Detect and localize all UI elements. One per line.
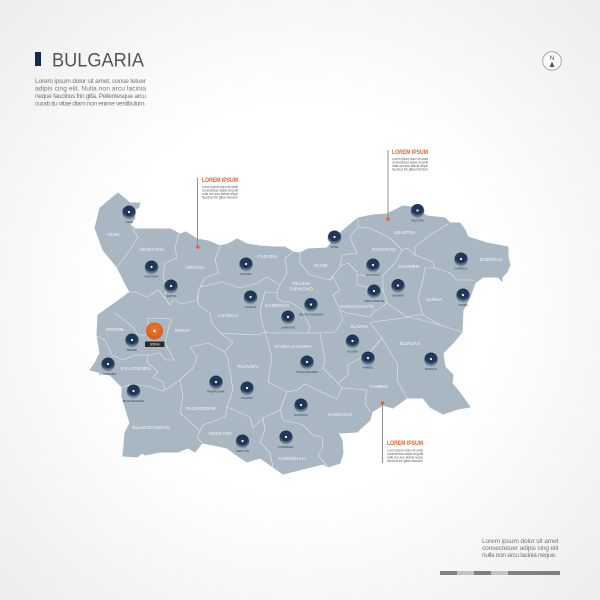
region labels: HASKOVO — [328, 412, 352, 418]
city labels: SLIVEN — [348, 350, 357, 354]
region labels: SMOLYAN — [208, 431, 232, 437]
callout: Vratsa — [196, 178, 238, 249]
callout: Yambol: Lorem ipsum dolor sit amet — [387, 448, 423, 452]
callout: Silistra: consectetuer adipis cing elit — [392, 160, 428, 164]
city labels: VARNA — [458, 303, 468, 307]
region labels: MONTANA — [140, 247, 165, 253]
city labels: PERNIK — [127, 348, 137, 352]
region labels: RUSE — [314, 263, 329, 269]
callout: Yambol: nulla non arcu lacinia neque — [387, 456, 423, 460]
region labels: TARGOVISHTE — [340, 304, 375, 310]
region labels: BLAGOEVGRAD — [132, 425, 170, 431]
region labels: SOFIA — [175, 328, 190, 334]
callout: Silistra — [386, 150, 428, 221]
region labels: LOVECH — [218, 313, 239, 319]
callout: Vratsa: consectetuer adipis cing elit — [202, 188, 238, 192]
intro text block — [35, 78, 147, 108]
city labels: BURGAS — [425, 367, 437, 371]
region labels: VARNA — [426, 297, 443, 303]
intro text block: Lorem ipsum dolor sit amet, conse tetuer — [35, 78, 147, 85]
region labels: SLIVEN — [350, 324, 368, 330]
footer text block: nulla non arcu lacinia neque. — [482, 552, 557, 559]
region labels: KYUSTENDIL — [121, 366, 152, 372]
callout: Silistra: nulla non arcu lacinia neque — [392, 164, 428, 168]
scale bar — [440, 571, 560, 575]
callout: Yambol: consectetuer adipis cing elit — [387, 452, 423, 456]
region labels: PERNIK — [106, 327, 125, 333]
city labels: PAZARDZHIK — [207, 390, 225, 394]
callout: Vratsa: LOREM IPSUM — [202, 178, 238, 184]
callout: Vratsa: faucibus frin gillae interdum — [202, 196, 238, 200]
region labels: KARDZHALI — [278, 456, 306, 462]
country shape — [90, 193, 510, 474]
region labels: STARA ZAGORA — [274, 344, 313, 350]
intro text block: neque faucibus frin gilla. Pellentesque arcu — [35, 93, 146, 100]
city labels: DOBRICH — [455, 266, 467, 270]
footer text block: Lorem ipsum dolor sit amet — [482, 538, 559, 545]
footer text block — [482, 538, 559, 559]
city labels: KYUSTENDIL — [99, 372, 117, 376]
region labels: VRATSA — [185, 265, 205, 271]
callout: Vratsa: Lorem ipsum dolor sit amet — [202, 185, 238, 189]
capital marker: Sofia — [145, 322, 164, 347]
city labels: YAMBOL — [362, 366, 374, 370]
callout: Yambol: faucibus frin gillae interdum — [387, 459, 423, 463]
city labels: VELIKO TARNOVO — [299, 312, 324, 316]
region labels: PLEVEN — [257, 254, 277, 260]
callout: Yambol: LOREM IPSUM — [387, 441, 423, 447]
city labels — [99, 218, 468, 453]
city labels: VIDIN — [125, 220, 133, 224]
city labels: KARDZHALI — [278, 445, 294, 449]
icon: north compass: N — [550, 55, 555, 62]
callout: Silistra: LOREM IPSUM — [392, 150, 428, 156]
region labels — [106, 230, 503, 462]
icon: north compass — [543, 52, 561, 70]
city labels: LOVECH — [245, 305, 256, 309]
map of Bulgaria — [90, 193, 510, 474]
city labels: SHUMEN — [392, 294, 404, 298]
callout: Silistra: faucibus frin gillae interdum — [392, 168, 428, 172]
intro text block: adipis cing elit. Nulla non arcu lacinia — [35, 86, 146, 92]
callout: Vratsa: nulla non arcu lacinia neque — [202, 192, 238, 196]
region labels: SILISTRA — [394, 230, 417, 236]
region labels: VIDIN — [106, 232, 120, 238]
city labels: SMOLYAN — [236, 449, 249, 453]
city labels: HASKOVO — [294, 413, 309, 417]
city labels: BLAGOEVGRAD — [123, 399, 144, 403]
city labels: STARA ZAGORA — [296, 370, 318, 374]
region labels: PAZARDZHIK — [186, 406, 217, 412]
callout: Yambol — [381, 401, 423, 463]
footer text block: consectetuer adipis cing elit — [482, 545, 559, 552]
city labels: MONTANA — [145, 274, 159, 278]
region labels: RAZGRAD — [372, 247, 396, 253]
callout: Silistra: Lorem ipsum dolor sit amet — [392, 157, 428, 161]
city labels: TARGOVISHTE — [364, 299, 384, 303]
region labels: SHUMEN — [398, 264, 420, 270]
region borders — [97, 218, 475, 467]
city pins — [101, 204, 470, 449]
city labels: PLOVDIV — [241, 396, 253, 400]
city labels: RUSE — [331, 245, 339, 249]
capital marker: Sofia: SOFIA — [150, 342, 160, 346]
city labels: GABROVO — [281, 326, 296, 330]
region labels: GABROVO — [265, 303, 290, 309]
title: BULGARIA — [52, 50, 144, 72]
city labels: VRATSA — [166, 294, 177, 298]
intro text block: curab itu vitae diam non enime vestibulum. — [35, 100, 146, 108]
region labels: PLOVDIV — [237, 364, 259, 370]
city labels: RAZGRAD — [366, 273, 380, 277]
region labels: YAMBOL — [369, 384, 389, 390]
city labels: PLEVEN — [240, 272, 252, 276]
region labels: VELIKO — [292, 281, 310, 287]
region labels: BURGAS — [400, 341, 421, 347]
region labels: DOBRICH — [480, 257, 503, 263]
city labels: SILISTRA — [411, 218, 424, 222]
region labels: TARNOVO — [289, 286, 313, 292]
